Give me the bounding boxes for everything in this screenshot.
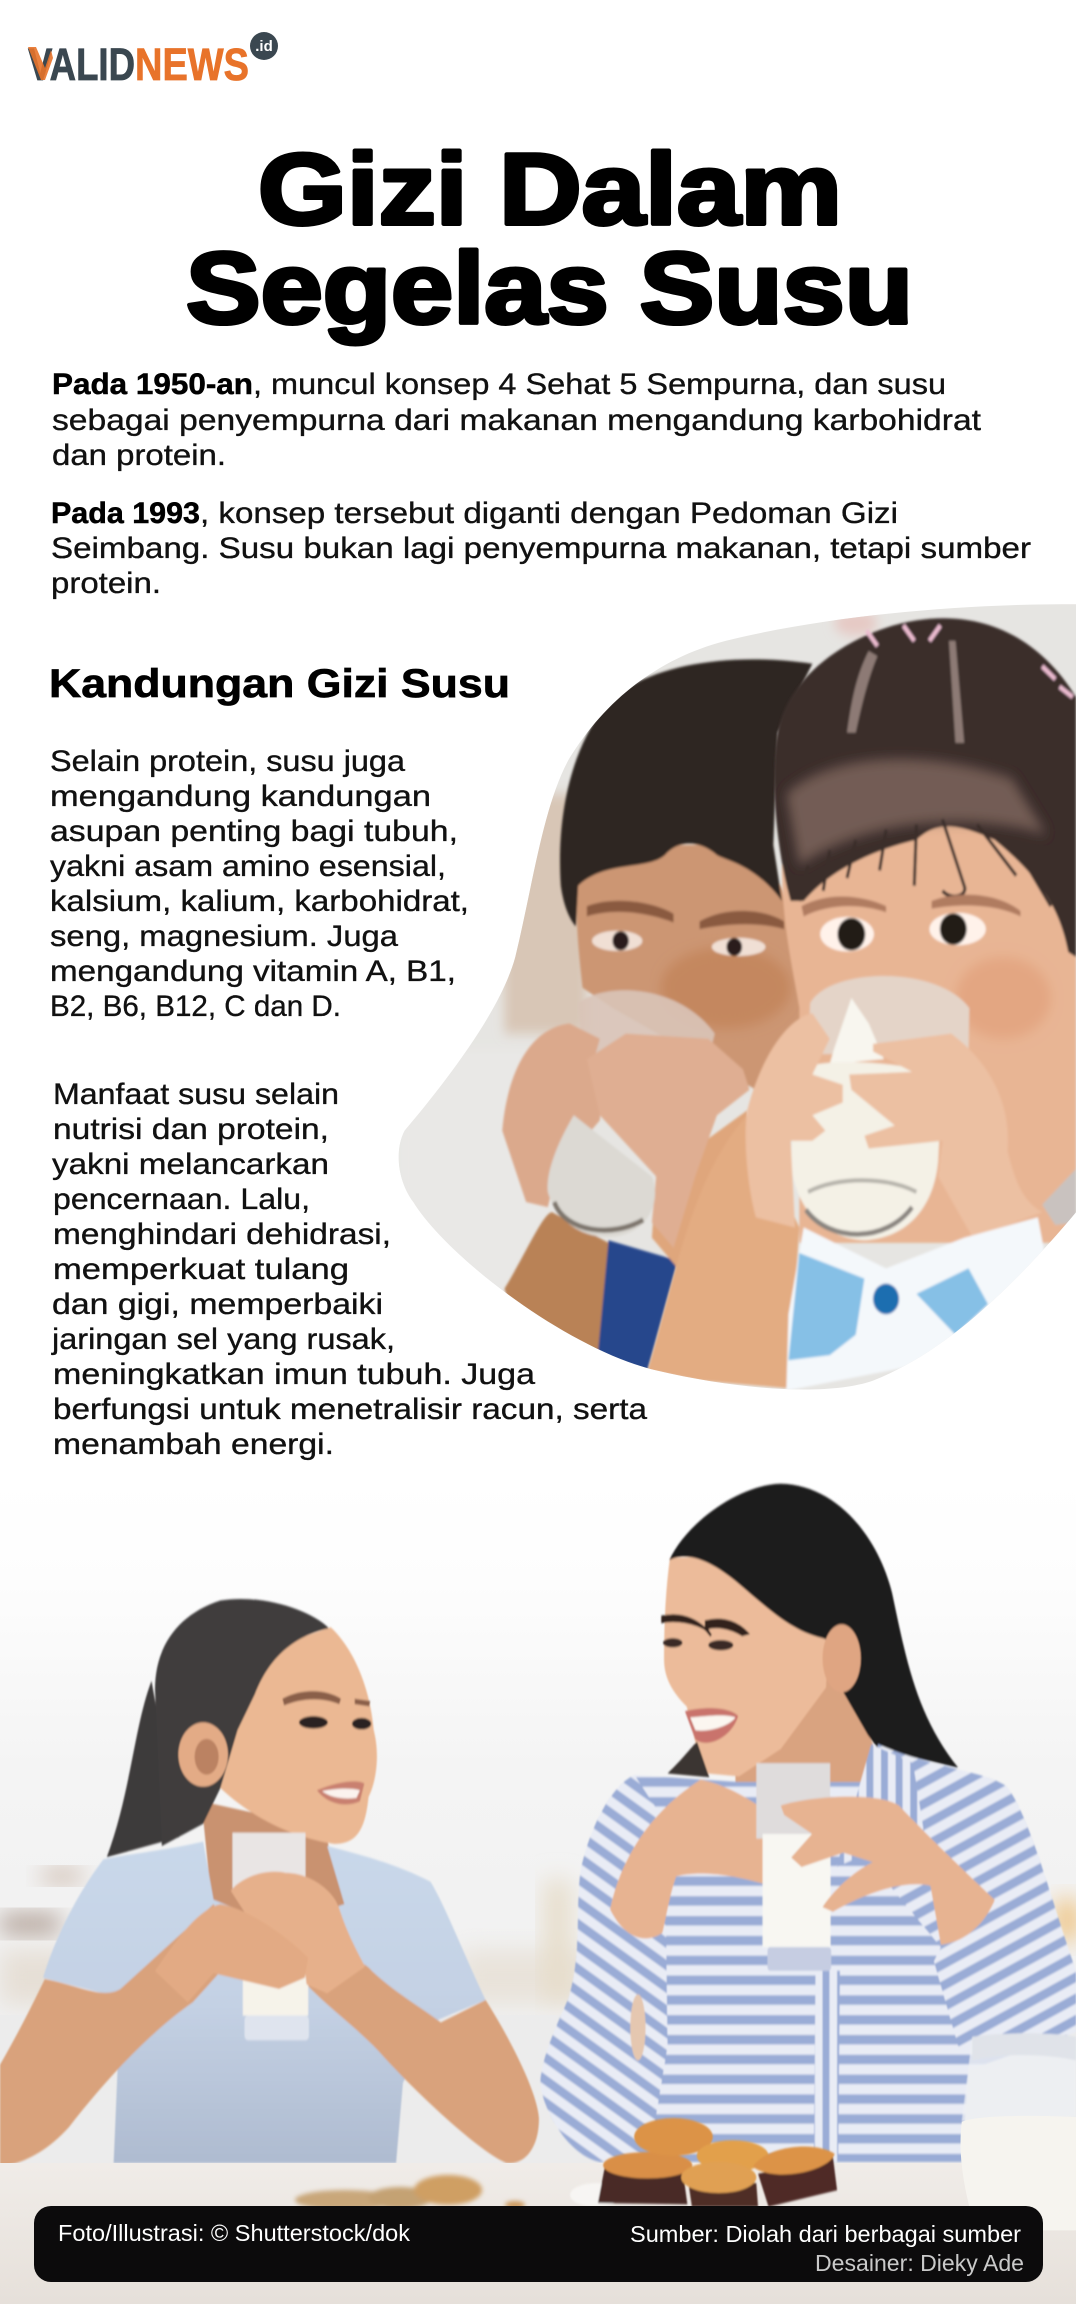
logo: Validnews.id: NEWS (135, 39, 249, 90)
text block: milk benefits: jaringan sel yang rusak, (51, 1323, 395, 1356)
logo: Validnews.id: VALID (28, 39, 135, 90)
text block: milk benefits: menambah energi. (53, 1428, 334, 1461)
text block: milk contents: yakni asam amino esensial, (50, 850, 446, 883)
text block: milk benefits: berfungsi untuk menetralisir racun, serta (53, 1393, 647, 1426)
logo: Validnews.id (28, 32, 278, 90)
heading: Kandungan Gizi Susu: Kandungan Gizi Susu (49, 662, 510, 706)
credits bar (34, 2206, 1043, 2282)
text block: milk contents (50, 745, 469, 1023)
text block: milk benefits: Manfaat susu selain (53, 1078, 339, 1111)
photo: mother and daughter with milk (0, 1480, 1076, 2170)
text block: milk benefits: dan gigi, memperbaiki (52, 1288, 383, 1321)
text block: milk benefits (51, 1078, 647, 1461)
photo backdrop (0, 1480, 1076, 2170)
credit: source: Sumber: Diolah dari berbagai sumber (630, 2221, 1021, 2247)
boy: body (502, 659, 812, 1370)
text block: 1950s concept: sebagai penyempurna dari makanan mengandung karbohidrat (52, 404, 982, 437)
text block: 1993 concept: Pada 1993 (51, 497, 200, 530)
milk jug (961, 2116, 1076, 2230)
text block: 1950s concept: dan protein. (52, 439, 226, 472)
text block: 1993 concept (51, 497, 1031, 600)
text block: milk contents: asupan penting bagi tubuh, (50, 815, 458, 848)
table top (0, 2163, 1076, 2304)
title: Segelas Susu (186, 233, 913, 345)
text block: 1950s concept: , muncul konsep 4 Sehat 5 Sempurna, dan susu (253, 368, 946, 401)
text block: milk contents: kalsium, kalium, karbohidrat, (50, 885, 469, 918)
cookies on plate (295, 2175, 525, 2210)
text block: 1950s concept (52, 368, 982, 472)
credit: designer: Desainer: Dieky Ade (815, 2250, 1024, 2276)
text block: milk benefits: yakni melancarkan (52, 1148, 329, 1181)
text block: milk benefits: nutrisi dan protein, (53, 1113, 329, 1146)
text block: milk benefits: menghindari dehidrasi, (53, 1218, 391, 1251)
text block: milk contents: seng, magnesium. Juga (50, 920, 398, 953)
text block: 1950s concept: Pada 1950-an (52, 368, 253, 401)
text block: milk contents: mengandung vitamin A, B1, (50, 955, 456, 988)
text block: milk benefits: meningkatkan imun tubuh. Juga (53, 1358, 535, 1391)
title (186, 134, 913, 345)
credit: photo: Foto/Illustrasi: © Shutterstock/dok (58, 2220, 410, 2246)
text block: 1993 concept: , konsep tersebut diganti dengan Pedoman Gizi (200, 497, 898, 530)
text block: 1993 concept: protein. (51, 567, 161, 600)
logo: Validnews.id: .id (255, 38, 273, 55)
daughter (0, 1599, 539, 2165)
photo: two children drinking milk in blob (392, 600, 1076, 1416)
text block: 1993 concept: Seimbang. Susu bukan lagi penyempurna makanan, tetapi sumber (51, 532, 1031, 565)
text block: milk benefits: memperkuat tulang (53, 1253, 349, 1286)
text block: milk contents: B2, B6, B12, C dan D. (50, 990, 341, 1023)
text block: milk contents: mengandung kandungan (50, 780, 431, 813)
girl: body and glass (648, 618, 1076, 1391)
text block: milk benefits: pencernaan. Lalu, (53, 1183, 310, 1216)
text block: milk contents: Selain protein, susu juga (50, 745, 405, 778)
muffins (570, 2118, 837, 2207)
mother (540, 1484, 1076, 2162)
title: Gizi Dalam (258, 134, 842, 246)
